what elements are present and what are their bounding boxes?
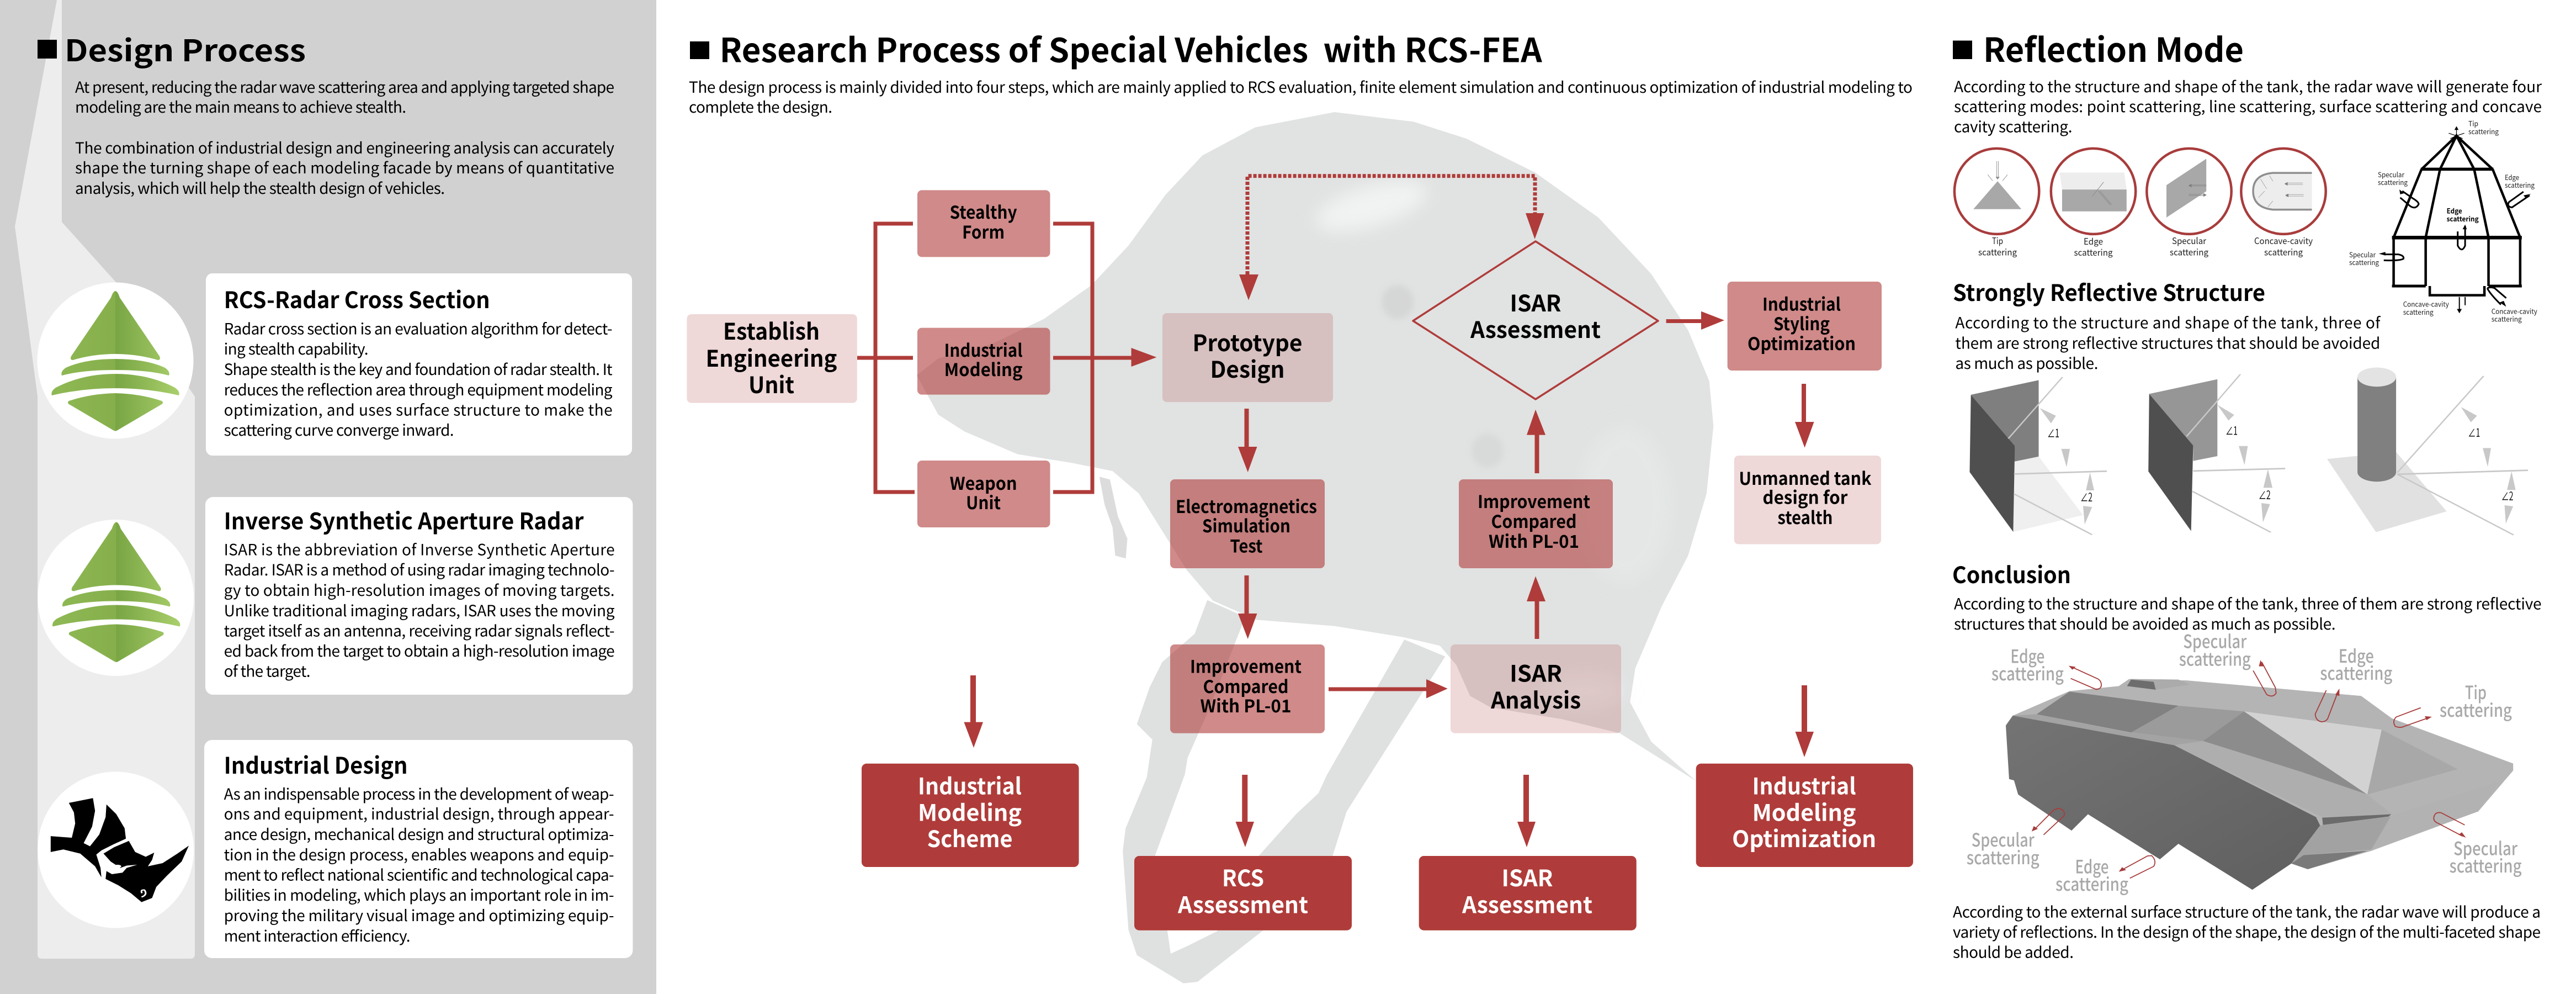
icon: concave-cavity scattering: scattering: [2264, 245, 2303, 258]
panel: design process background: [0, 0, 656, 994]
panel: industrial design card: [204, 740, 633, 958]
diagram: dihedral without floor: [2148, 374, 2285, 532]
diagram: tank scattering schematic: Specular: [2378, 169, 2404, 179]
diagram: dihedral without floor: ∠1: [2226, 422, 2238, 439]
box: prototype design: Design: [1210, 351, 1285, 384]
arrow: to industrial modeling optimization: [1795, 685, 1814, 757]
diagram: tank scattering schematic: scattering: [2505, 179, 2535, 190]
diagram: tank scattering schematic: scattering: [2349, 257, 2379, 267]
card text: ISAR: ed back from the target to obtain a high-resolution image: [224, 639, 615, 662]
text block: conclusion closing: variety of reflections. In the design of the shape, the design of the multi-faceted shape: [1953, 921, 2541, 943]
card heading: industrial design: Industrial Design: [224, 747, 408, 780]
box: industrial modeling scheme: Modeling: [918, 795, 1022, 828]
text block: design process intro: At present, reducing the radar wave scattering area and applying targeted shape: [75, 76, 614, 98]
box: industrial modeling: [917, 328, 1050, 395]
icon: ISAR green logo: [38, 520, 194, 676]
box: electromagnetics simulation test: Test: [1230, 532, 1263, 558]
arrow: ISAR analysis to improvement: [1527, 577, 1545, 639]
text block: strongly reflective structure: According to the structure and shape of the tank, three of: [1955, 311, 2381, 334]
box: unmanned tank design: Unmanned tank: [1739, 465, 1872, 490]
text block: research process intro: [689, 76, 1913, 118]
card text: ISAR: of the target.: [224, 659, 311, 681]
box: ISAR assessment result: ISAR: [1501, 860, 1553, 893]
card text: RCS: scattering curve converge inward.: [224, 419, 454, 441]
text block: strongly reflective structure: them are strong reflective structures that should be avoided: [1955, 331, 2380, 353]
labels: tank scattering types: Specular: [2453, 834, 2517, 860]
text block: strongly reflective structure: as much as possible.: [1955, 352, 2098, 374]
card text: industrial design: ment interaction efficiency.: [224, 924, 411, 947]
box: improvement compared left: With PL-01: [1200, 692, 1292, 718]
box: improvement compared right: Improvement: [1478, 488, 1590, 514]
box: unmanned tank design: stealth: [1777, 504, 1833, 530]
box: RCS assessment: [1134, 856, 1352, 930]
card text: ISAR: gy to obtain high-resolution images of moving targets.: [224, 579, 615, 601]
card text: ISAR: [224, 538, 615, 681]
box: ISAR analysis: Analysis: [1490, 682, 1581, 715]
background image: helmet silhouette: [917, 112, 1713, 984]
diagram: tank scattering schematic: Edge: [2447, 205, 2462, 216]
heading: strongly reflective structure: Strongly Reflective Structure: [1953, 274, 2265, 308]
box: establish engineering unit: Engineering: [705, 340, 837, 373]
text block: design process intro: analysis, which will help the stealth design of vehicles.: [75, 177, 445, 199]
heading: reflection mode: Reflection Mode: [1983, 24, 2244, 72]
box: weapon unit: Unit: [966, 489, 1001, 515]
box: ISAR analysis: ISAR: [1510, 655, 1562, 689]
text block: research process intro: The design process is mainly divided into four steps, which are mainly applied to RCS evaluation, finite element simulation and continuous optimization of industrial modeling to: [689, 76, 1913, 98]
card text: industrial design: tion in the design process, enables weapons and equip-: [224, 843, 614, 865]
card text: RCS: ing stealth capability.: [224, 337, 369, 359]
labels: tank scattering types: Specular: [2183, 627, 2247, 654]
card text: RCS: [224, 318, 613, 441]
diagram: tank scattering schematic: scattering: [2403, 306, 2434, 317]
diagram: cylinder on plane: [2327, 367, 2528, 535]
text block: reflection mode intro: [1954, 75, 2542, 138]
box: industrial styling optimization: Optimization: [1748, 330, 1856, 356]
labels: tank scattering types: scattering: [1967, 843, 2039, 870]
box: establish engineering unit: Establish: [723, 313, 820, 346]
callouts: scattering arrows on tank: [2032, 660, 2466, 878]
card text: industrial design: ons and equipment, industrial design, through appear-: [224, 802, 614, 824]
arrow: styling to unmanned tank: [1795, 384, 1814, 448]
icon: edge scattering: [2051, 149, 2136, 258]
labels: tank scattering types: scattering: [2440, 696, 2512, 722]
box: stealthy form: Form: [962, 219, 1005, 244]
text block: conclusion closing: [1953, 901, 2541, 963]
diagram: tank scattering schematic: Concave-cavity: [2492, 306, 2537, 316]
box: unmanned tank design: design for: [1762, 484, 1847, 510]
diagram: tank render: [2006, 679, 2513, 890]
card text: industrial design: As an indispensable process in the development of weap-: [224, 782, 614, 805]
arrow: improvement to ISAR analysis: [1329, 679, 1448, 698]
text block: conclusion closing: should be added.: [1953, 941, 2074, 963]
labels: tank scattering types: Specular: [1972, 826, 2035, 852]
text block: strongly reflective structure: [1955, 311, 2381, 374]
box: industrial modeling optimization: [1696, 764, 1913, 867]
text block: design process intro: shape the turning shape of each modeling facade by means of quantitative: [75, 156, 614, 178]
labels: tank scattering types: Edge: [2075, 853, 2108, 879]
card text: RCS: Radar cross section is an evaluation algorithm for detect-: [224, 318, 613, 340]
diagram: tank scattering schematic: scattering: [2468, 126, 2499, 136]
box: industrial styling optimization: Styling: [1773, 310, 1830, 336]
box: improvement compared left: Compared: [1203, 673, 1288, 699]
labels: tank scattering types: Edge: [2010, 642, 2044, 668]
labels: tank scattering types: scattering: [1991, 659, 2064, 686]
box: electromagnetics simulation test: Electromagnetics: [1176, 493, 1317, 519]
diagram: dihedral with floor: [1969, 377, 2107, 535]
labels: tank scattering types: [1967, 627, 2521, 896]
labels: tank scattering types: Tip: [2465, 678, 2487, 705]
box: establish engineering unit: Unit: [748, 367, 794, 400]
card text: ISAR: Radar. ISAR is a method of using radar imaging technolo-: [224, 558, 615, 580]
box: industrial modeling optimization: Optimization: [1732, 821, 1876, 854]
box: ISAR analysis: [1451, 644, 1621, 733]
box: weapon unit: Weapon: [950, 470, 1017, 495]
card text: ISAR: ISAR is the abbreviation of Inverse Synthetic Aperture: [224, 538, 615, 561]
diagram: tank scattering schematic: scattering: [2447, 213, 2479, 224]
heading: design process: Design Process: [65, 27, 306, 70]
heading: research process: Research Process of Special Vehicles with RCS-FEA: [720, 24, 1542, 72]
card text: ISAR: target itself as an antenna, receiving radar signals reflect-: [224, 620, 615, 642]
diagram: tank scattering schematic: Edge: [2505, 172, 2519, 182]
icon: specular scattering: Specular: [2172, 234, 2207, 247]
box: industrial modeling: Modeling: [944, 356, 1023, 382]
box: improvement compared right: Compared: [1491, 508, 1576, 533]
icon: concave-cavity scattering: Concave-cavity: [2254, 234, 2313, 247]
box: ISAR assessment result: Assessment: [1462, 887, 1592, 920]
diagram: dihedral without floor: ∠2: [2259, 487, 2271, 503]
card text: RCS: reduces the reflection area through equipment modeling: [224, 378, 613, 400]
card text: RCS: optimization, and uses surface structure to make the: [224, 399, 613, 421]
icon: edge scattering: Edge: [2084, 234, 2103, 247]
arrow: dotted feedback loop: [1239, 176, 1544, 300]
icon: tip scattering: [1954, 149, 2039, 258]
card text: industrial design: proving the military visual image and optimizing equip-: [224, 904, 614, 926]
box: RCS assessment: Assessment: [1177, 887, 1308, 920]
arrow: to prototype design: [1053, 348, 1156, 367]
box: improvement compared right: With PL-01: [1489, 528, 1579, 553]
diagram: cylinder on plane: ∠2: [2501, 488, 2514, 504]
box: industrial styling optimization: Industrial: [1762, 291, 1841, 316]
decision diamond: ISAR assessment: ISAR: [1510, 285, 1561, 318]
card text: ISAR: Unlike traditional imaging radars, ISAR uses the moving: [224, 599, 615, 621]
diagram: tank scattering schematic: Specular: [2349, 249, 2376, 260]
box: electromagnetics simulation test: Simulation: [1202, 512, 1290, 538]
card text: industrial design: [224, 782, 614, 947]
icon: specular scattering: scattering: [2170, 245, 2208, 258]
icon: rhino logo: [38, 772, 194, 928]
text block: design process intro: modeling are the main means to achieve stealth.: [75, 96, 406, 118]
diagram: cylinder on plane: ∠1: [2468, 424, 2480, 441]
text block: reflection mode intro: scattering modes: point scattering, line scattering, surface scattering and concave: [1954, 95, 2542, 117]
icon: specular scattering: [2147, 149, 2232, 258]
labels: tank scattering types: scattering: [2179, 645, 2251, 672]
labels: tank scattering types: scattering: [2320, 659, 2392, 685]
box: improvement compared left: Improvement: [1190, 653, 1302, 679]
text block: design process intro: The combination of industrial design and engineering analysis can accurately: [75, 136, 614, 158]
box: industrial styling optimization: [1728, 282, 1882, 371]
icon: RCS green logo: [38, 283, 193, 438]
box: prototype design: [1162, 313, 1333, 402]
icon: tip scattering: Tip: [1992, 234, 2003, 247]
box: industrial modeling optimization: Modeling: [1752, 795, 1856, 828]
card text: RCS: Shape stealth is the key and foundation of radar stealth. It: [224, 358, 613, 380]
card heading: RCS: RCS-Radar Cross Section: [224, 282, 490, 315]
panel: ISAR card: [205, 497, 633, 695]
box: industrial modeling optimization: Industrial: [1752, 768, 1856, 801]
text block: reflection mode intro: cavity scattering.: [1954, 115, 2072, 138]
box: industrial modeling scheme: Industrial: [918, 768, 1022, 801]
text block: conclusion intro: According to the structure and shape of the tank, three of them are strong reflective: [1954, 593, 2541, 615]
diagram: tank scattering schematic: scattering: [2492, 314, 2522, 324]
arrow: prototype to electromagnetics: [1238, 409, 1257, 472]
text block: conclusion closing: According to the external surface structure of the tank, the radar wave will produce a: [1953, 901, 2541, 923]
box: stealthy form: Stealthy: [950, 199, 1017, 224]
diagram: tank scattering schematic: Tip: [2468, 118, 2478, 129]
box: industrial modeling scheme: Scheme: [927, 821, 1012, 854]
arrow: ISAR assessment to styling: [1666, 311, 1724, 330]
arrow: improvement to ISAR assessment: [1527, 410, 1545, 473]
box: weapon unit: [917, 461, 1050, 527]
box: improvement compared left: [1170, 644, 1325, 733]
text block: design process intro: [75, 76, 614, 199]
decision diamond: ISAR assessment: [1413, 241, 1658, 399]
labels: tank scattering types: scattering: [2056, 870, 2128, 896]
box: industrial modeling scheme: [862, 764, 1079, 867]
card text: industrial design: ment to reflect national scientific and technological capa-: [224, 864, 614, 886]
arrow: to RCS assessment: [1235, 775, 1254, 847]
diagram: tank scattering schematic: Concave-cavity: [2403, 299, 2449, 309]
labels: tank scattering types: Edge: [2339, 642, 2374, 668]
arrow: electromagnetics to improvement: [1238, 575, 1257, 639]
heading: conclusion: Conclusion: [1952, 557, 2071, 590]
box: prototype design: Prototype: [1192, 325, 1303, 358]
box: ISAR assessment result: [1419, 856, 1637, 930]
card heading: ISAR: Inverse Synthetic Aperture Radar: [224, 503, 584, 536]
box: electromagnetics simulation test: [1170, 479, 1325, 568]
labels: tank scattering types: scattering: [2450, 852, 2521, 878]
box: stealthy form: [917, 190, 1050, 257]
icon: concave-cavity scattering: [2241, 149, 2326, 258]
diagram: dihedral with floor: ∠1: [2047, 425, 2059, 441]
box: unmanned tank design: [1734, 456, 1881, 544]
card text: industrial design: bilities in modeling, which plays an important role in im-: [224, 884, 614, 906]
diagram: tank scattering schematic: scattering: [2378, 177, 2408, 187]
icon: tip scattering: scattering: [1978, 245, 2017, 258]
box: improvement compared right: [1459, 479, 1613, 568]
text block: conclusion intro: [1954, 593, 2541, 635]
box: industrial modeling: Industrial: [944, 337, 1023, 362]
connector: bracket left and right: [857, 224, 1092, 492]
text block: conclusion intro: structures that should be avoided as much as possible.: [1954, 612, 2336, 635]
decision diamond: ISAR assessment: Assessment: [1470, 311, 1601, 345]
box: establish engineering unit: [687, 313, 857, 403]
text block: research process intro: complete the design.: [689, 96, 832, 118]
card text: industrial design: ance design, mechanical design and structural optimiza-: [224, 823, 614, 845]
text block: reflection mode intro: According to the structure and shape of the tank, the radar wave will generate four: [1954, 75, 2542, 97]
panel: RCS card: [206, 273, 632, 456]
arrow: to industrial modeling scheme: [964, 675, 983, 748]
diagram: dihedral with floor: ∠2: [2080, 489, 2092, 505]
box: RCS assessment: RCS: [1222, 860, 1264, 893]
icon: edge scattering: scattering: [2074, 245, 2113, 258]
diagram: tank scattering schematic: [2349, 118, 2537, 324]
arrow: to ISAR assessment result: [1517, 775, 1536, 847]
